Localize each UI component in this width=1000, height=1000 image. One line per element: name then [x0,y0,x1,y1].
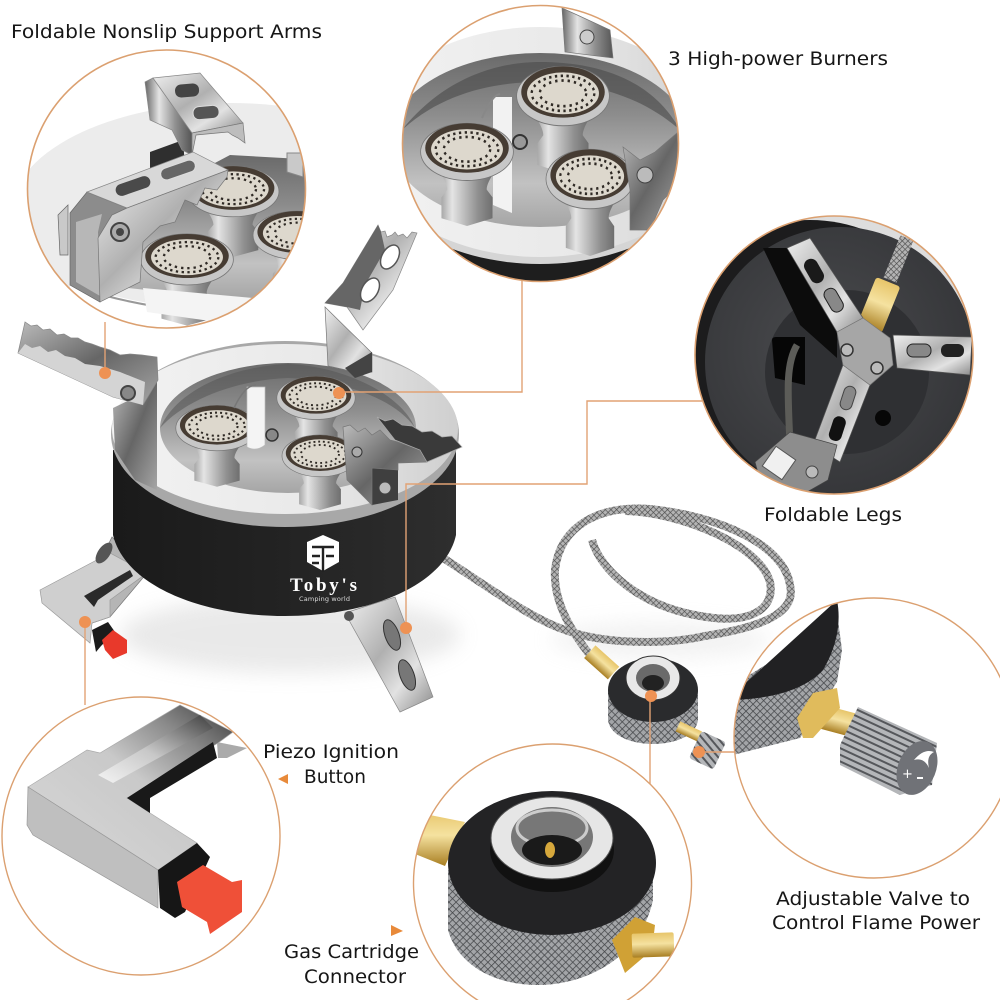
igniter post [234,385,278,449]
soft ground shadow [120,597,770,673]
label: Adjustable Valve to Control Flame Power [772,888,980,934]
connector lines [85,278,738,788]
stove rim [111,341,459,527]
logo: Toby's [290,575,358,596]
circle: support arms detail [26,49,306,329]
label: Gas Cartridge Connector: Gas Cartridge [284,941,419,963]
regulator connector [584,645,726,770]
circle: gas cartridge connector detail [405,744,692,1000]
rear support arm [325,225,417,378]
left leg [40,537,147,643]
circle: foldable legs detail [694,215,974,495]
label: Foldable Legs: Foldable Legs [764,504,902,526]
label: Piezo Ignition Button [263,741,399,788]
stove body [113,450,456,616]
label: Piezo Ignition Button: Button [304,766,366,788]
main stove illustration [18,225,462,712]
front support arm [343,417,462,505]
label: Gas Cartridge Connector: Connector [304,966,406,988]
right leg [344,597,433,712]
label: Piezo Ignition Button: Piezo Ignition [263,741,399,763]
logo: Camping world [299,595,350,603]
label: 3 High-power Burners: 3 High-power Burners [668,48,888,70]
title: Foldable Nonslip Support Arms: Foldable Nonslip Support Arms [11,21,322,43]
igniter red button [92,622,127,659]
circle: adjustable valve detail [725,598,1000,878]
label: Adjustable Valve to Control Flame Power: Control Flame Power [772,912,980,934]
label: Adjustable Valve to Control Flame Power: Adjustable Valve to [776,888,970,910]
burners [176,376,358,510]
connector dots [79,367,705,758]
label: Gas Cartridge Connector [284,925,419,988]
circle: burners detail [402,4,680,282]
logo [290,535,358,603]
circle: adjustable valve detail: + [902,767,913,782]
gas hose [440,509,791,655]
circle: piezo ignition detail [2,697,280,975]
far left support arm [18,322,158,405]
